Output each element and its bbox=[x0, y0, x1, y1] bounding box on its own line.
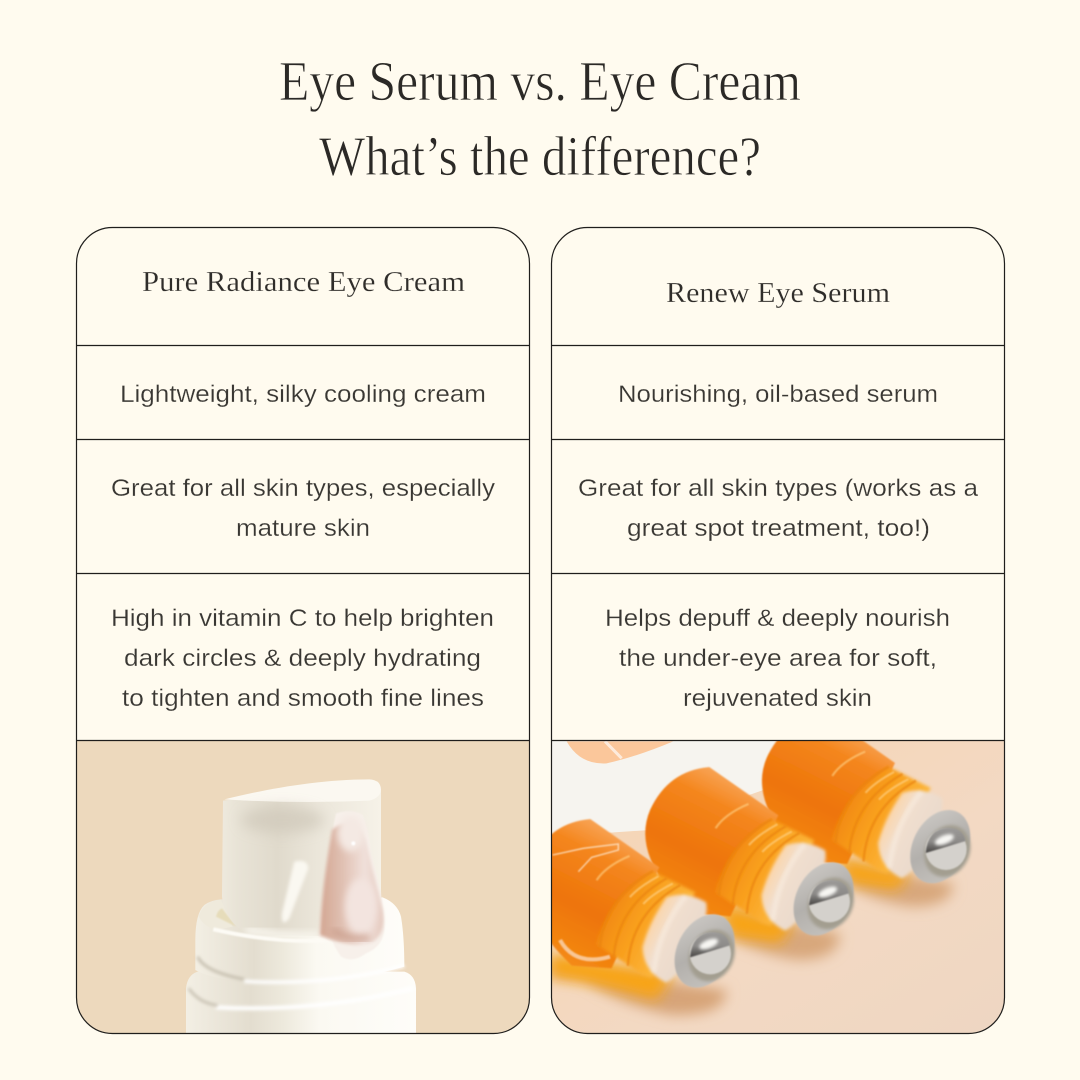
tube label bbox=[567, 741, 673, 763]
photo: three roller bottles bbox=[552, 741, 1004, 1033]
pump cap bbox=[222, 782, 381, 937]
text block: benefits: High in vitamin C to help brighten bbox=[111, 605, 494, 632]
title: Eye Serum vs. Eye Cream bbox=[279, 51, 801, 113]
heading: Renew Eye Serum: Renew Eye Serum bbox=[666, 277, 890, 309]
white tube backdrop bbox=[552, 741, 778, 834]
text block: benefits: Helps depuff & deeply nourish bbox=[605, 605, 950, 632]
text block: benefits: dark circles & deeply hydrating bbox=[124, 645, 481, 672]
text block: benefits bbox=[111, 605, 494, 712]
table outlines bbox=[76, 228, 1004, 1034]
collar inner rim bbox=[199, 899, 233, 930]
panel frame: cream column bbox=[76, 228, 530, 1034]
roller bottle: back bbox=[760, 741, 972, 884]
title: What’s the difference? bbox=[319, 126, 761, 188]
panel: Renew Eye Serum bbox=[552, 283, 1004, 1033]
roller shadows bbox=[550, 857, 953, 1015]
panel frame: serum column bbox=[552, 228, 1004, 1034]
text block: benefits: rejuvenated skin bbox=[683, 685, 872, 712]
text block: benefits: the under-eye area for soft, bbox=[619, 645, 937, 672]
text block: skin types: great spot treatment, too!) bbox=[627, 515, 930, 542]
text block: skin types bbox=[578, 475, 979, 542]
text block: skin types bbox=[111, 475, 495, 542]
roller bottle: middle bbox=[644, 766, 856, 936]
glass lip reflection on front bottle bbox=[553, 844, 618, 872]
bottle base bbox=[186, 972, 416, 1033]
collar bbox=[195, 897, 404, 972]
title bbox=[279, 51, 801, 188]
roller bottle: front bbox=[552, 818, 736, 988]
heading: Pure Radiance Eye Cream: Pure Radiance Eye Cream bbox=[142, 266, 465, 298]
text block: texture: Lightweight, silky cooling cream bbox=[120, 381, 486, 408]
cap reflection bbox=[282, 861, 308, 922]
panel: Pure Radiance Eye Cream bbox=[76, 228, 530, 1034]
text block: benefits bbox=[605, 605, 950, 712]
collar front rim bbox=[213, 929, 334, 941]
cream drop bbox=[334, 812, 384, 959]
text block: skin types: mature skin bbox=[236, 515, 370, 542]
text block: texture: Nourishing, oil-based serum bbox=[618, 381, 938, 408]
text block: benefits: to tighten and smooth fine lines bbox=[122, 685, 484, 712]
photo: cream pump bottle bbox=[76, 740, 530, 1034]
text block: skin types: Great for all skin types, especially bbox=[111, 475, 495, 502]
text block: skin types: Great for all skin types (works as a bbox=[578, 475, 979, 502]
